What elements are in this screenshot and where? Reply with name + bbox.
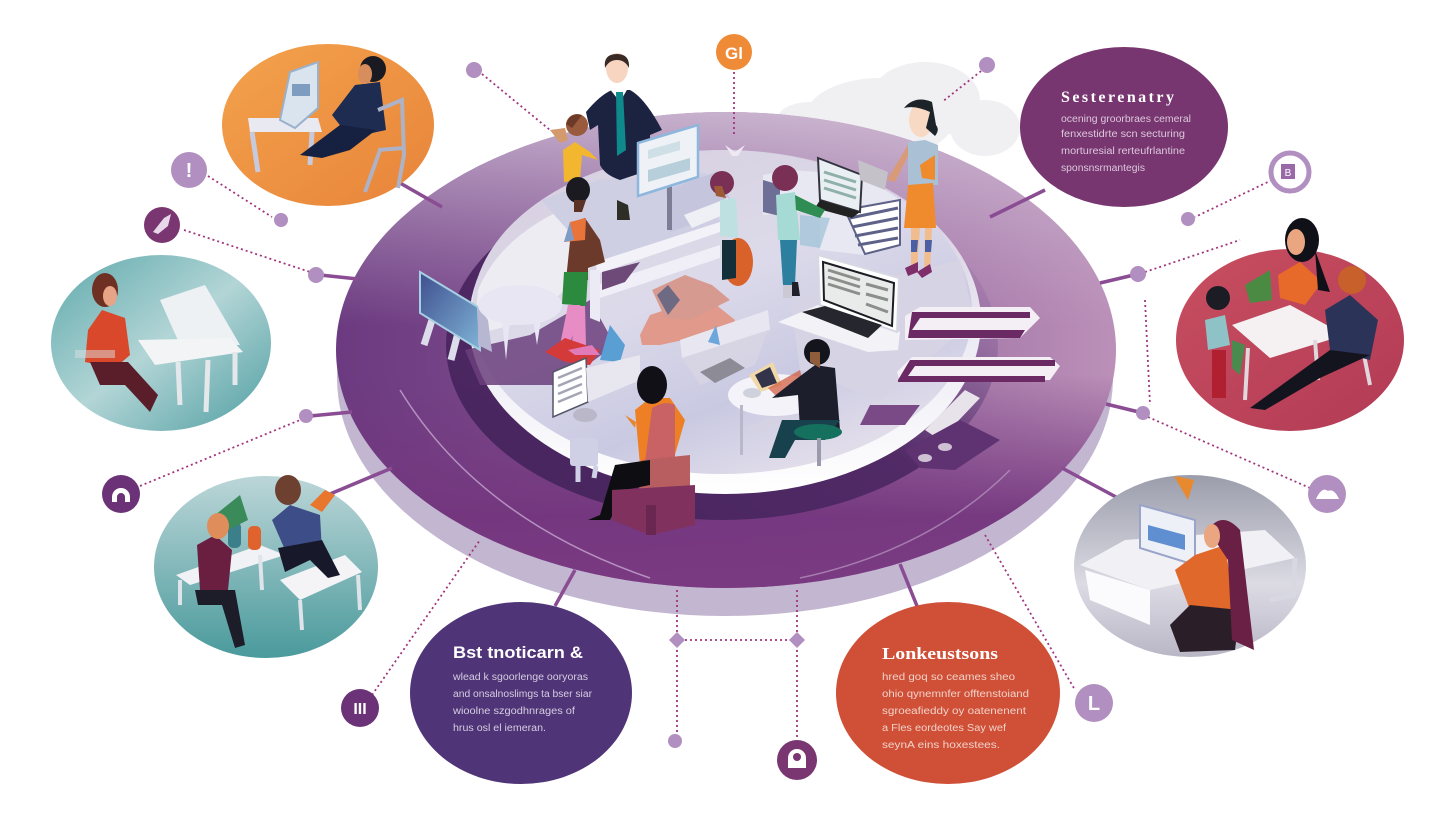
body text: best: and onsalnoslimgs ta bser siar bbox=[453, 689, 593, 700]
panel: teal woman scene bbox=[51, 255, 271, 431]
main desk bbox=[541, 172, 736, 322]
woman with green skirt bbox=[545, 177, 625, 365]
body text: lonkeustsons: sgroeafieddy oy oatenenent bbox=[882, 706, 1026, 717]
right shelves bbox=[860, 307, 1060, 470]
icon: L badge bbox=[1075, 684, 1113, 722]
panel: orange scene bbox=[222, 44, 434, 206]
heading: secretary: Sesterenatry bbox=[1061, 89, 1174, 106]
panel: secretary text bbox=[1020, 47, 1228, 207]
icon: mug badge bbox=[1271, 153, 1309, 191]
dark inner ring bbox=[446, 170, 998, 520]
icon: mug badge: B bbox=[1285, 168, 1292, 179]
body text: secretary: sponsnsrmantegis bbox=[1061, 163, 1145, 174]
icon: L badge: L bbox=[1088, 693, 1100, 715]
solid connector arms bbox=[310, 183, 1143, 606]
boy with light shirt bbox=[710, 171, 753, 286]
connector nodes bbox=[274, 57, 1195, 748]
icon: hat badge bbox=[1308, 475, 1346, 513]
body text: lonkeustsons: a Fles eordeotes Say wef bbox=[882, 723, 1006, 734]
icon: bars badge: III bbox=[353, 701, 367, 718]
icon: headset badge bbox=[102, 475, 140, 513]
man at round table bbox=[728, 339, 845, 466]
open laptop bbox=[778, 255, 900, 352]
dotted connector lines bbox=[140, 68, 1310, 740]
body text: secretary: ocening groorbraes cemeral bbox=[1061, 114, 1191, 125]
child in yellow bbox=[550, 114, 598, 182]
pink figure center bbox=[640, 275, 770, 385]
woman on right bbox=[887, 100, 938, 278]
icon: exclamation badge bbox=[171, 152, 207, 188]
body text: best: hrus osl el iemeran. bbox=[453, 723, 546, 734]
icon: bars badge bbox=[341, 689, 379, 727]
central platform bbox=[336, 112, 1116, 616]
right workstation bbox=[763, 158, 900, 255]
icon: orange badge bbox=[716, 34, 752, 70]
panel: best practices text bbox=[410, 602, 632, 784]
body text: secretary bbox=[1061, 114, 1191, 174]
panel: teal friends scene bbox=[154, 475, 378, 658]
small tablet with document bbox=[553, 355, 640, 422]
body text: lonkeustsons: hred goq so ceames sheo bbox=[882, 672, 1016, 683]
body text: secretary: morturesial rerteufrlantine bbox=[1061, 146, 1185, 157]
heading: lonkeustsons: Lonkeustsons bbox=[882, 644, 998, 663]
body text: best: wioolne szgodhnrages of bbox=[452, 706, 575, 717]
panel: gray scene bbox=[1074, 475, 1306, 657]
icon: exclamation badge: ! bbox=[186, 160, 192, 182]
small center tick bbox=[725, 145, 745, 156]
body text: lonkeustsons: seynA eins hoxestees. bbox=[882, 740, 1000, 751]
person with teal shirt bbox=[772, 165, 825, 298]
body text: lonkeustsons: ohio qynemnfer offtenstoiand bbox=[882, 689, 1029, 700]
man in suit bbox=[586, 53, 662, 180]
panel: lonkeustsons text bbox=[836, 602, 1060, 784]
body text: best bbox=[452, 672, 593, 734]
body text: lonkeustsons bbox=[882, 672, 1029, 751]
cloud backdrop bbox=[778, 62, 1020, 158]
left monitor bbox=[420, 272, 492, 360]
desktop monitor bbox=[638, 125, 698, 196]
woman on chair bbox=[570, 366, 695, 535]
panel: crimson scene bbox=[1176, 218, 1404, 431]
body text: secretary: fenxestidrte scn secturing bbox=[1061, 129, 1185, 140]
icon: leaf badge bbox=[144, 207, 180, 243]
icon: lock badge bbox=[777, 740, 817, 780]
icon: orange badge: Gl bbox=[725, 44, 743, 63]
heading: best: Bst tnoticarn & bbox=[453, 643, 583, 662]
inner floor bbox=[469, 150, 981, 494]
body text: best: wlead k sgoorlenge ooryoras bbox=[452, 672, 588, 683]
small round table left bbox=[478, 285, 562, 360]
